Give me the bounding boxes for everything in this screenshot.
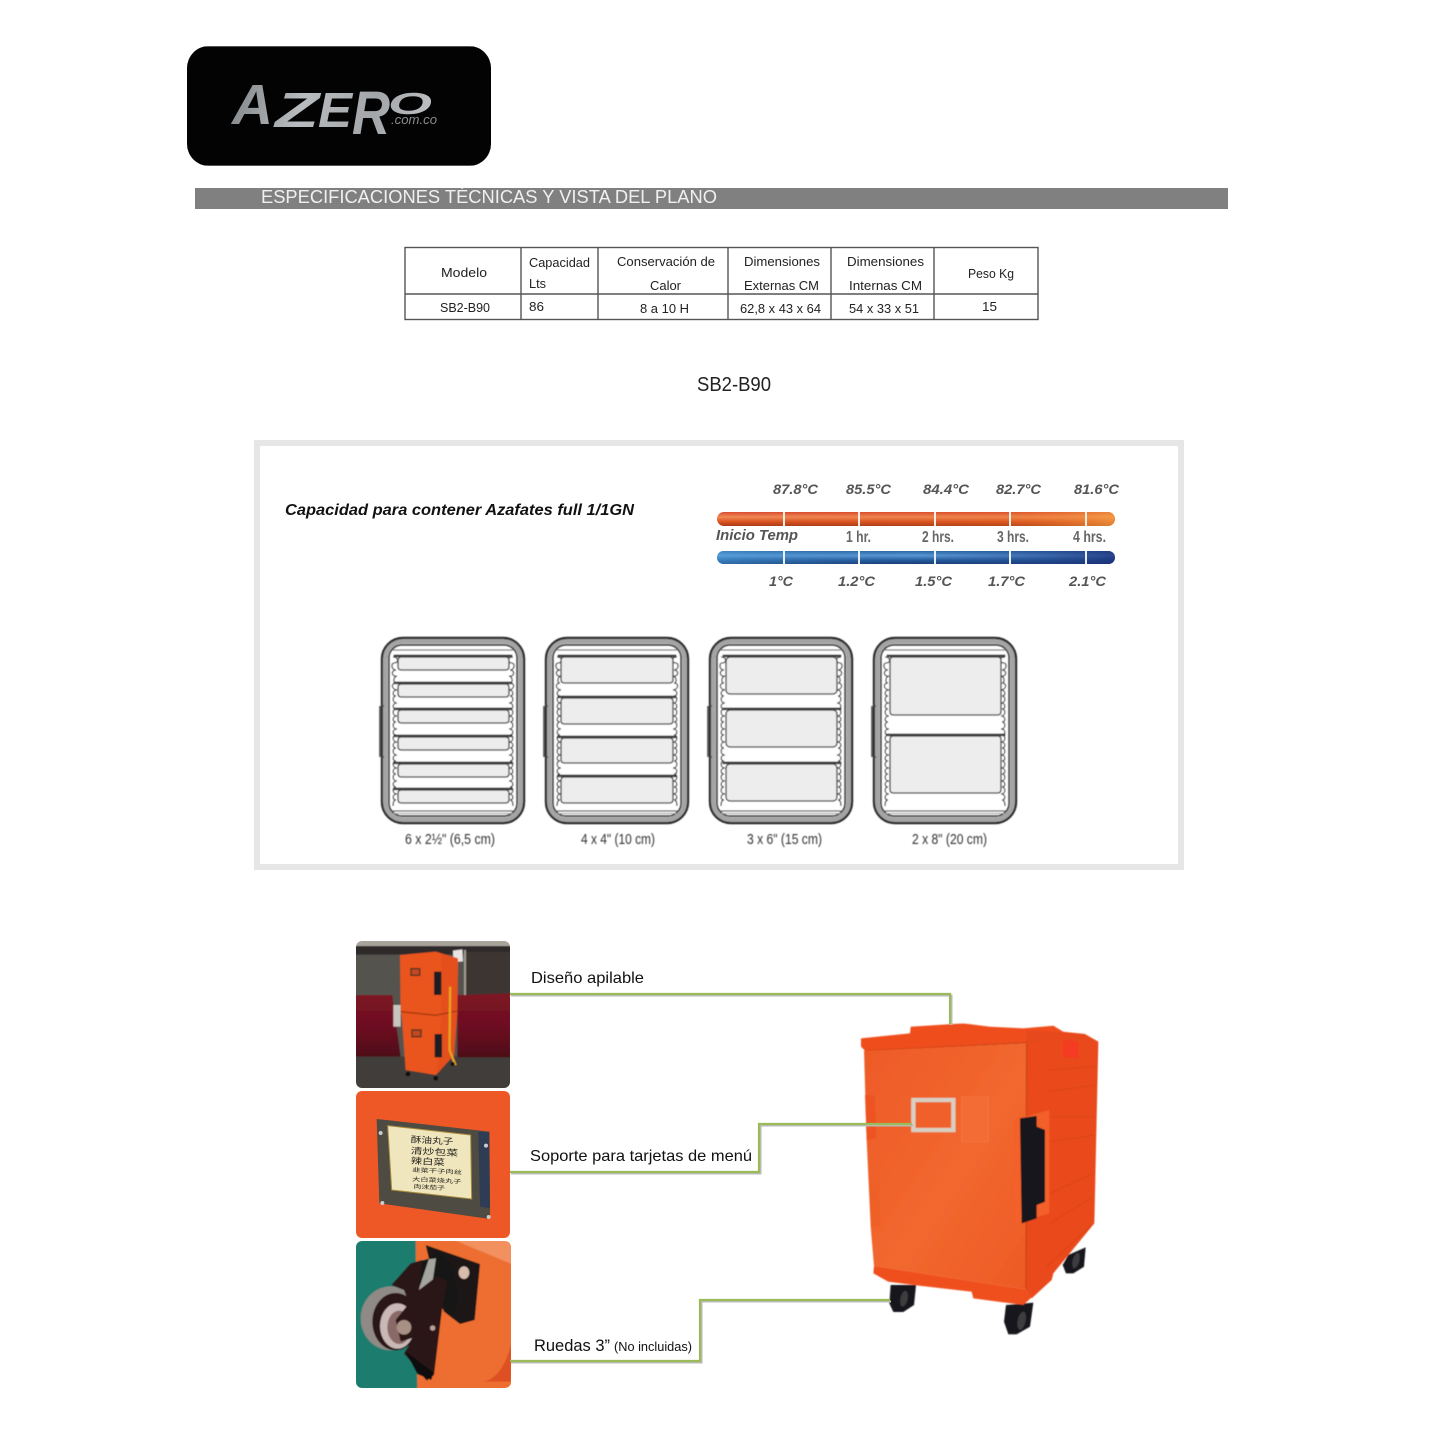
caster fork — [391, 1260, 447, 1381]
photo: menu card holder: 韭菜干子肉丝 — [412, 1165, 463, 1176]
specifications table: 86 — [529, 300, 544, 314]
hot temperature labels: 84.4°C — [923, 481, 970, 497]
time labels: 3 hrs. — [997, 529, 1029, 546]
hot temperature labels: 87.8°C — [773, 481, 819, 497]
label: wheels: Ruedas 3” — [534, 1337, 610, 1355]
photo: menu card holder — [355, 1090, 511, 1238]
cold temperature labels: 1.2°C — [838, 573, 876, 589]
specifications table: Modelo — [441, 266, 487, 280]
tray diagram: 3 pans: 3 x 6" (15 cm) — [747, 832, 822, 848]
cold temperature labels: 1.7°C — [988, 573, 1026, 589]
cold temperature bar — [717, 551, 1115, 564]
specifications table: 62,8 x 43 x 64 — [740, 302, 821, 316]
time labels: 1 hr. — [846, 529, 871, 546]
specifications table: Capacidad — [529, 256, 590, 270]
photo: menu card holder: 清炒包菜 — [411, 1145, 459, 1159]
specifications table: Dimensiones — [847, 255, 924, 269]
specifications table: Lts — [529, 277, 546, 291]
connector lines — [510, 994, 952, 1362]
logo wordmark: A — [230, 73, 273, 137]
hot temperature bar — [717, 512, 1115, 526]
door handle — [1013, 1110, 1049, 1223]
time labels: Inicio Temp — [716, 527, 798, 544]
model title: SB2-B90 — [697, 374, 771, 396]
specifications table: 54 x 33 x 51 — [849, 302, 919, 316]
cold temperature labels — [769, 573, 1107, 589]
time labels: 2 hrs. — [922, 529, 954, 546]
label: wheels — [534, 1337, 692, 1355]
tray diagram: 2 pans: 2 x 8" (20 cm) — [912, 832, 987, 848]
label: wheels: (No incluidas) — [614, 1340, 692, 1354]
label: stackable design: Diseño apilable — [531, 970, 644, 987]
hot temperature labels: 81.6°C — [1074, 481, 1120, 497]
cart base — [873, 1266, 1032, 1305]
hot temperature labels: 82.7°C — [996, 481, 1042, 497]
cold temperature labels: 1°C — [769, 573, 794, 589]
logo wordmark: Z — [272, 84, 322, 138]
photo: stacked carts — [354, 940, 514, 1090]
cold temperature labels: 1.5°C — [915, 573, 953, 589]
label: menu card holder: Soporte para tarjetas de menú — [530, 1148, 752, 1165]
tray diagram: 6 pans — [380, 638, 524, 848]
tray diagram: 2 pans — [872, 638, 1016, 848]
photo: caster wheel — [354, 1240, 514, 1390]
cart side — [1026, 1031, 1098, 1298]
logo wordmark: R — [352, 79, 390, 147]
cart wheels — [889, 1247, 1086, 1334]
specifications table: Calor — [650, 279, 681, 293]
time labels: 4 hrs. — [1073, 529, 1106, 546]
logo wordmark: E — [318, 84, 353, 138]
temperature chart — [716, 481, 1120, 589]
cart handle slot — [1063, 1040, 1078, 1058]
specifications table: Internas CM — [849, 279, 922, 293]
specifications table: 15 — [982, 300, 997, 314]
tray diagram: 4 pans: 4 x 4" (10 cm) — [581, 832, 655, 848]
tray diagram: 4 pans — [544, 638, 688, 848]
specifications table: Externas CM — [744, 279, 819, 293]
specifications table: SB2-B90 — [440, 301, 490, 315]
cart front door — [864, 1043, 1027, 1289]
caster mounting plate — [426, 1245, 480, 1324]
hot temperature labels: 85.5°C — [846, 481, 892, 497]
specifications table: 8 a 10 H — [640, 302, 689, 316]
cart door tabs — [865, 1095, 876, 1140]
section heading bar: ESPECIFICACIONES TÉCNICAS Y VISTA DEL PLANO — [261, 187, 717, 207]
logo wordmark: O — [388, 86, 432, 121]
hot temperature labels — [773, 481, 1120, 497]
card holder — [913, 1100, 953, 1130]
time labels — [716, 527, 1106, 546]
capacity heading: Capacidad para contener Azafates full 1/1GN — [285, 502, 634, 519]
tray diagram: 6 pans: 6 x 2½" (6,5 cm) — [405, 832, 495, 848]
caster wheel — [360, 1286, 407, 1352]
tray diagram: 3 pans — [708, 638, 852, 848]
photo: menu card holder: 肉沫茄子 — [413, 1181, 446, 1192]
logo domain: .com.co — [391, 113, 437, 127]
section heading bar — [195, 187, 1228, 209]
specifications table: Conservación de — [617, 255, 715, 269]
photo: menu card holder: 大白菜烧丸子 — [412, 1174, 462, 1186]
photo: menu card holder: 辣白菜 — [411, 1155, 446, 1168]
cold temperature labels: 2.1°C — [1068, 573, 1107, 589]
logo — [187, 46, 491, 166]
panel: capacity and temperature — [257, 443, 1181, 867]
cart lid — [861, 1023, 1098, 1051]
specifications table: Dimensiones — [744, 255, 820, 269]
product: orange cart — [861, 1023, 1098, 1334]
photo: menu card holder: 酥油丸子 — [411, 1133, 454, 1148]
specifications table — [405, 247, 1038, 320]
specifications table: Peso Kg — [968, 267, 1014, 281]
